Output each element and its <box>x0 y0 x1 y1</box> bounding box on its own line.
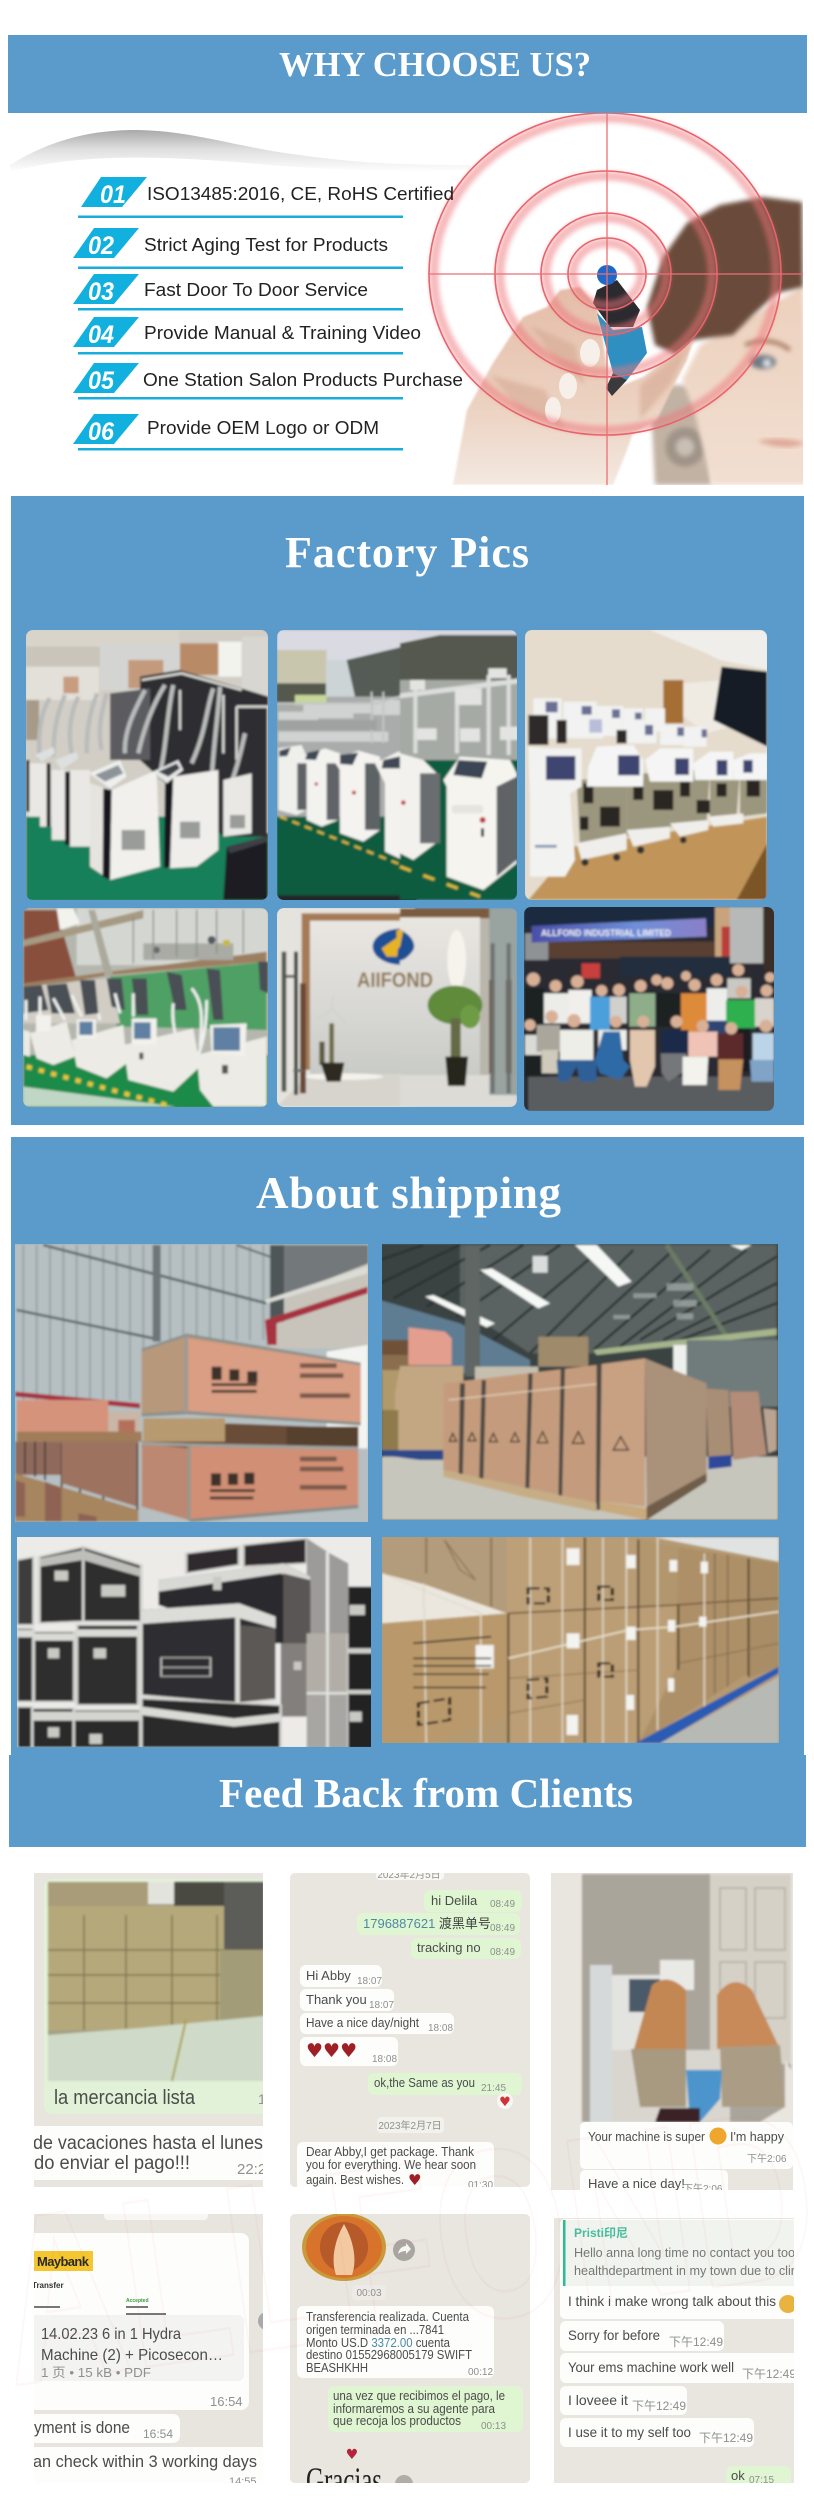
date chip: 2023年2月7日 <box>378 2119 442 2132</box>
bubble: thanks message: you for everything. We hear soon <box>306 2157 476 2172</box>
sticker: praying hands <box>302 2213 386 2281</box>
reaction heart: ♥ <box>499 2095 511 2110</box>
card: tracking chat <box>290 1866 530 2202</box>
bubble: tracking number: 08:49 <box>490 1923 515 1934</box>
bubble: works well: Your ems machine work well <box>568 2359 734 2375</box>
item 05 <box>73 363 463 400</box>
woman: lower hair and earring <box>650 385 712 485</box>
bubble: works well: 下午12:49 <box>742 2367 796 2381</box>
bubble: thank you <box>300 1989 394 2011</box>
bubble: hi delila: 08:49 <box>490 1899 515 1910</box>
bubble: use it myself: 下午12:49 <box>699 2431 753 2445</box>
heading: feed back from clients: Feed Back from Clients <box>219 1770 633 1816</box>
bubble: hi abby: Hi Abby <box>306 1968 351 1983</box>
sticker: gracias <box>306 2447 382 2498</box>
woman: lips <box>757 439 806 447</box>
bubble: tracking no <box>411 1938 521 1959</box>
bubble: check within 3 days: 14:55 <box>229 2476 257 2488</box>
bubble: payment reply: 00:13 <box>481 2421 506 2432</box>
list: reasons <box>73 177 463 450</box>
woman: eyebrow and eye <box>745 341 790 369</box>
bubble: use it myself <box>560 2418 754 2447</box>
bubble: hi abby <box>300 1965 382 1987</box>
bubble: payment reply <box>328 2386 523 2432</box>
bubble: machine is super: Your machine is super <box>588 2129 706 2144</box>
bubble: hearts: 18:08 <box>372 2054 397 2065</box>
date chip top: 2023年2月5日 <box>377 1868 441 1881</box>
bubble: thanks message <box>297 2142 494 2202</box>
item 01: 01 <box>100 181 126 209</box>
card: payment receipt chat <box>20 2208 276 2497</box>
bubble: love it: 下午12:49 <box>632 2399 686 2413</box>
panel: why choose us header <box>8 35 807 113</box>
bubble: have a nice day: Have a nice day! <box>588 2176 685 2191</box>
document box: Machine (2) + Picosecon… <box>41 2347 223 2364</box>
date chip top <box>376 1873 444 1880</box>
bubble: tracking no: 08:49 <box>490 1947 515 1958</box>
item 05: 05 <box>88 367 115 395</box>
bubble: transfer details: destino 01552968005179 SWIFT <box>306 2347 472 2362</box>
photo: compact machines on wood floor <box>523 628 770 902</box>
bubble: machine is super: I'm happy <box>730 2129 784 2144</box>
item 03: Fast Door To Door Service <box>144 280 368 300</box>
bubble: machine is super: 下午2:06 <box>747 2152 787 2165</box>
bubble: sorry: 下午12:49 <box>669 2335 723 2349</box>
bubble: have a nice day <box>580 2170 728 2200</box>
item 04 <box>73 317 421 354</box>
item 03: 03 <box>88 278 114 306</box>
bubble: hearts <box>300 2037 398 2066</box>
item 05: One Station Salon Products Purchase <box>143 370 463 390</box>
item 02 <box>73 228 403 269</box>
bubble: vacation text: de vacaciones hasta el lunes <box>33 2133 263 2154</box>
photo: machines with screens <box>22 907 270 1110</box>
sticker: gracias: ♥ <box>346 2447 358 2463</box>
bubble: thank you: Thank you <box>306 1992 367 2007</box>
photo: boxes <box>48 1882 264 2081</box>
document box: 14.02.23 6 in 1 Hydra <box>41 2326 181 2343</box>
bubble: sorry <box>560 2321 724 2351</box>
item 02: 02 <box>88 232 114 260</box>
bubble: ok <box>726 2466 791 2488</box>
bubble: document: Transfer <box>32 2281 64 2290</box>
heading: about shipping: About shipping <box>256 1168 562 1218</box>
bubble: payment done <box>20 2414 180 2443</box>
item 02: Strict Aging Test for Products <box>144 235 388 255</box>
bubble: same as you <box>368 2073 522 2095</box>
bubble: use it myself: I use it to my self too <box>568 2424 691 2440</box>
panel: about shipping and feedback heading <box>9 1137 806 1847</box>
card: praise chat <box>554 2218 800 2488</box>
bubble: document <box>20 2233 249 2410</box>
bubble: thanks message: Dear Abby,I get package. Thank <box>306 2144 474 2159</box>
bubble: thanks message: ♥ <box>408 2171 421 2189</box>
bubble: ok: ok <box>731 2468 745 2483</box>
bubble: transfer details: BEASHKHH <box>306 2360 368 2375</box>
item 03 <box>73 274 403 310</box>
decorative grey wave <box>10 130 470 172</box>
bubble: ok: 07:15 <box>749 2475 774 2486</box>
bubble: payment reply: que recoja los productos <box>333 2413 461 2428</box>
bubble: transfer details: Monto US.D 3372.00 cuenta <box>306 2335 451 2350</box>
bubble: hearts: ♥♥♥ <box>306 2040 357 2062</box>
item 04: Provide Manual & Training Video <box>144 323 421 343</box>
bubble: hi abby: 18:07 <box>357 1976 382 1987</box>
bubble: check within 3 days <box>20 2447 270 2497</box>
document box: 1 页 • 15 kB • PDF <box>41 2365 151 2380</box>
item 06: Provide OEM Logo or ODM <box>147 418 379 438</box>
bubble: tracking no: tracking no <box>417 1940 481 1955</box>
item 01: ISO13485:2016, CE, RoHS Certified <box>147 184 454 204</box>
bubble: vacation text: do enviar el pago!!! <box>34 2153 190 2174</box>
bubble: thanks message: 01:30 <box>468 2180 493 2191</box>
scroll button <box>258 2312 276 2330</box>
date chip <box>377 2117 444 2133</box>
bubble: photo message: la mercancia lista <box>54 2087 196 2109</box>
pen <box>593 265 647 396</box>
hero: hand drawing target with woman <box>428 113 810 485</box>
quoted message: healthdepartment in my town due to clir <box>574 2263 796 2278</box>
item 06: 06 <box>88 418 115 446</box>
quoted message: Hello anna long time no contact you too <box>574 2245 795 2260</box>
title: why choose us: WHY CHOOSE US? <box>279 45 591 84</box>
bubble: transfer details: origen terminada en ...7841 <box>306 2322 444 2337</box>
bubble: nice day <box>300 2013 454 2034</box>
bubble: hi delila: hi Delila <box>431 1893 478 1908</box>
bubble: nice day: Have a nice day/night <box>306 2015 419 2030</box>
bubble: machine is super <box>580 2122 793 2169</box>
woman: hair <box>647 197 803 355</box>
bubble: check within 3 days: an check within 3 working days <box>33 2452 257 2471</box>
bubble: payment reply: informaremos a su agente para <box>333 2401 496 2416</box>
photo: legs and machine <box>582 1874 791 2122</box>
document box <box>20 2315 244 2381</box>
card: goods ready chat <box>34 1873 263 2187</box>
bubble: sorry: Sorry for before <box>568 2327 660 2343</box>
bubble: photo message <box>44 1879 284 2114</box>
bubble: document: 16:54 <box>210 2394 243 2409</box>
item 04: 04 <box>88 321 114 349</box>
forward button <box>393 2239 415 2261</box>
bubble: reply with praise <box>560 2219 800 2319</box>
photo: office reception with logo wall: AIIFOND <box>357 969 433 992</box>
photo: team group picture <box>523 905 777 1112</box>
bubble: same as you: ok,the Same as you <box>374 2075 475 2090</box>
maybank logo <box>34 2251 93 2271</box>
bubble: transfer details: 00:12 <box>468 2367 493 2378</box>
reaction heart <box>497 2093 513 2110</box>
hand: finger shading <box>490 325 690 430</box>
bubble: vacation text <box>34 2126 263 2180</box>
bubble: payment done: yment is done <box>34 2418 130 2437</box>
quoted message: Pristi印尼 <box>574 2226 628 2240</box>
bubble: vacation text: 22:2 <box>237 2161 266 2178</box>
hand <box>453 287 693 485</box>
bubble: same as you: 21:45 <box>481 2083 506 2094</box>
bubble: have a nice day: 下午2:06 <box>683 2182 723 2195</box>
bubble: thank you: 18:07 <box>369 2000 394 2011</box>
bubble: nice day: 18:08 <box>428 2023 453 2034</box>
time chip <box>352 2285 386 2300</box>
bubble: transfer details: Transferencia realizada. Cuenta <box>306 2309 470 2324</box>
bubble: payment done: 16:54 <box>143 2427 173 2441</box>
panel: factory pics <box>11 496 804 1125</box>
bubble: document: Accepted <box>126 2298 149 2304</box>
photo: cardboard boxes on blue pallets <box>379 1535 782 1745</box>
bubble: reply with praise: I think i make wrong talk about this <box>568 2293 776 2309</box>
quoted message <box>562 2220 800 2286</box>
photo: row of white machines <box>277 628 518 905</box>
photo: black flight cases <box>13 1535 374 1748</box>
bubble: love it: I loveee it <box>568 2392 628 2408</box>
bubble: works well <box>560 2353 800 2383</box>
time chip: 00:03 <box>356 2288 382 2299</box>
photo: wooden crates in warehouse <box>13 1243 370 1523</box>
woman: face <box>682 286 810 485</box>
target rings <box>428 113 803 485</box>
maybank logo: Maybank <box>37 2254 90 2269</box>
item 01 <box>78 177 454 218</box>
photo: office reception with logo wall <box>275 907 517 1113</box>
item 06 <box>73 414 403 450</box>
bubble: tracking number <box>357 1913 520 1935</box>
bubble: love it <box>560 2386 687 2415</box>
hand: nails <box>545 339 600 423</box>
bubble: hi delila <box>424 1890 522 1912</box>
card: transfer chat <box>290 2213 530 2498</box>
card: customer using machine <box>551 1873 793 2200</box>
photo: machines with handles on green floor <box>23 627 270 903</box>
bubble: payment reply: una vez que recibimos el pago, le <box>333 2388 505 2403</box>
heading: factory pics: Factory Pics <box>285 528 529 577</box>
bubble: tracking number: 1796887621 渡黑单号 <box>363 1916 491 1931</box>
photo: team group picture: ALLFOND INDUSTRIAL LIMITED <box>541 928 671 938</box>
bubble: thanks message: again. Best wishes. <box>306 2172 404 2187</box>
date chip <box>104 2208 208 2220</box>
photo: stacked crates in tall warehouse <box>380 1243 780 1522</box>
bubble: photo message: 1 <box>258 2091 266 2107</box>
bubble: transfer details <box>297 2306 494 2378</box>
